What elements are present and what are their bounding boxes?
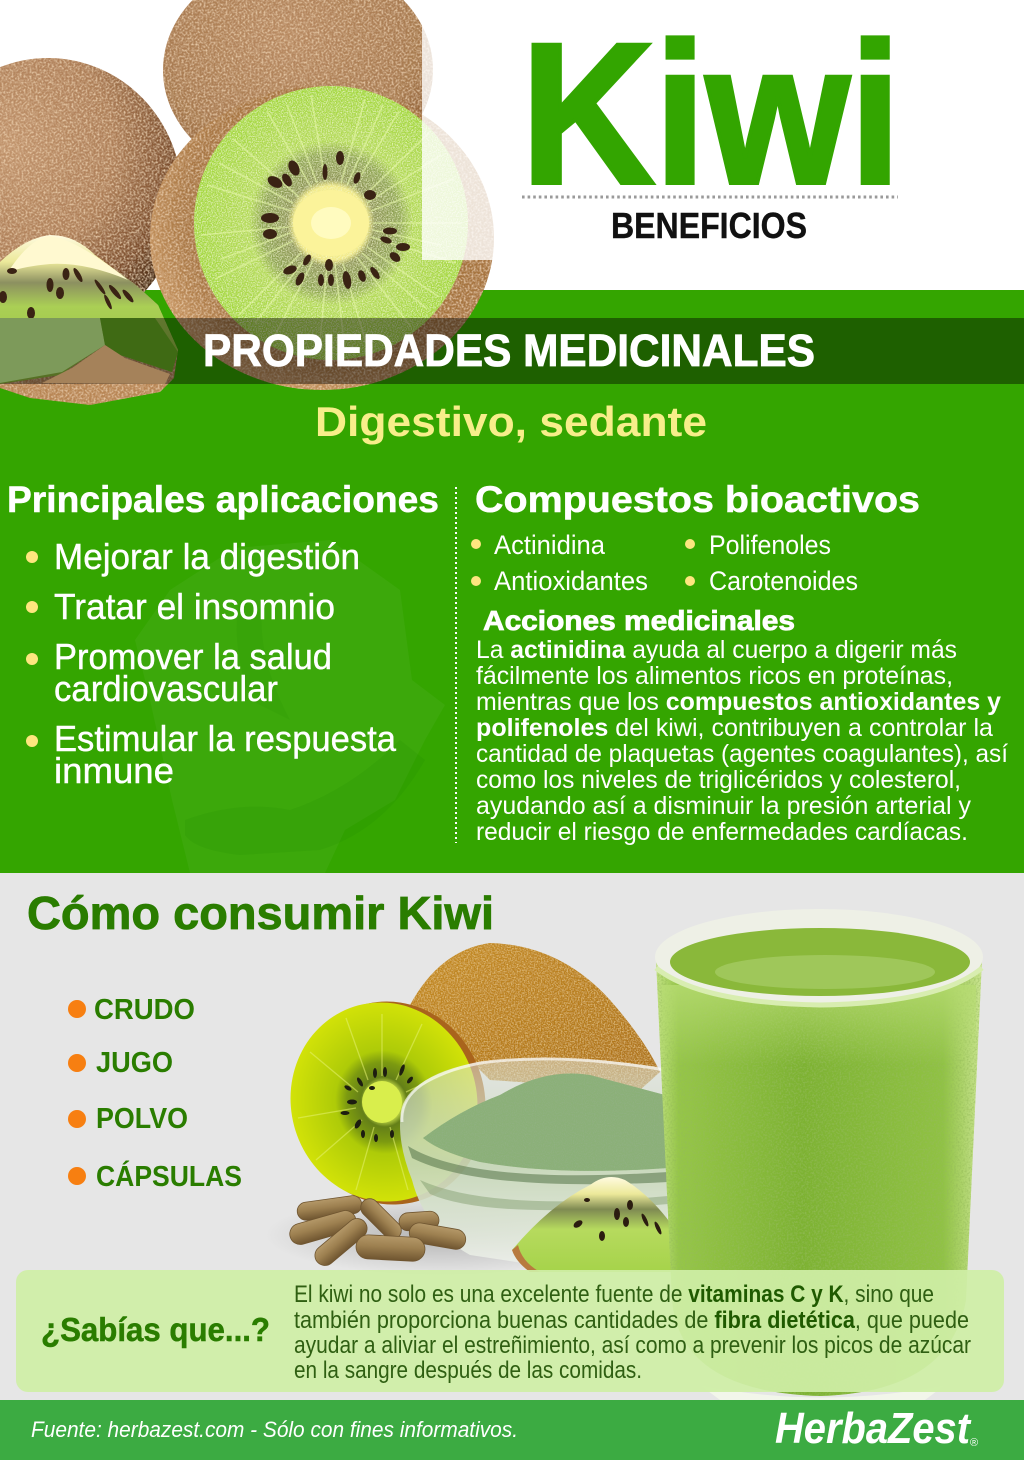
item: jugo xyxy=(68,1047,173,1079)
item: capsulas: CÁPSULAS xyxy=(96,1159,242,1193)
text block: acciones medicinales: La actinidina ayuda al cuerpo a digerir más xyxy=(476,636,957,664)
subheading: digestivo, sedante: Digestivo, sedante xyxy=(315,398,707,445)
panel: como consumir background xyxy=(0,873,1024,1400)
list item: respuesta inmune: inmune xyxy=(54,750,174,791)
text block: acciones medicinales: fácilmente los alimentos ricos en proteínas, xyxy=(476,662,953,690)
list item: respuesta inmune: Estimular la respuesta xyxy=(54,718,397,759)
text block: acciones medicinales: mientras que los compuestos antioxidantes y xyxy=(476,688,1001,716)
list: forms of consumption xyxy=(68,994,242,1193)
item: crudo: CRUDO xyxy=(94,994,195,1026)
heading: compuestos bioactivos: Compuestos bioactivos xyxy=(475,479,920,520)
illustration: golden kiwi back xyxy=(410,943,660,1090)
illustration: bowl of kiwi powder xyxy=(400,1058,668,1270)
logo: HerbaZest: HerbaZest xyxy=(775,1404,972,1453)
list item: insomnio: Tratar el insomnio xyxy=(54,586,335,627)
text block: acciones medicinales: polifenoles del kiwi, contribuyen a controlar la xyxy=(476,714,993,742)
heading: principales aplicaciones: Principales aplicaciones xyxy=(7,479,439,520)
text block: acciones medicinales xyxy=(476,636,1008,846)
text block: acciones medicinales: cantidad de plaquetas (agentes coagulantes), así xyxy=(476,740,1008,768)
illustration: kiwi wedge xyxy=(0,235,178,405)
list item: salud cardiovascular: cardiovascular xyxy=(54,668,278,709)
heading: acciones medicinales: Acciones medicinales xyxy=(483,605,795,636)
illustration: kiwi slice xyxy=(268,980,508,1226)
list item: digestion: Mejorar la digestión xyxy=(54,536,360,577)
illustration: wedge seen through band xyxy=(0,318,178,384)
panel: compuestos bioactivos xyxy=(471,479,1008,846)
panel: green properties background xyxy=(0,290,1024,873)
text block: sabias que: también proporciona buenas cantidades de fibra dietética, que puede xyxy=(294,1307,969,1334)
illustration: capsules xyxy=(287,1194,467,1270)
text block: acciones medicinales: ayudando así a disminuir la presión arterial y xyxy=(476,792,971,820)
text block: acciones medicinales: como los niveles de triglicéridos y colesterol, xyxy=(476,766,961,794)
compound: carotenoides: Carotenoides xyxy=(709,566,858,596)
compound: antioxidantes: Antioxidantes xyxy=(494,566,648,596)
list item: salud cardiovascular xyxy=(26,636,332,709)
list item: respuesta inmune xyxy=(26,718,397,791)
source note: Fuente: herbazest.com - Sólo con fines informativos. xyxy=(31,1417,518,1442)
illustration: whole kiwi, left xyxy=(0,58,182,334)
background: white header xyxy=(0,0,1024,290)
compound: actinidina: Actinidina xyxy=(494,530,606,560)
heading: como consumir kiwi: Cómo consumir Kiwi xyxy=(27,887,494,939)
title: Kiwi: Kiwi xyxy=(521,1,901,226)
dark band behind section heading xyxy=(0,318,1024,384)
list item: salud cardiovascular: Promover la salud xyxy=(54,636,332,677)
footer bar xyxy=(0,1400,1024,1460)
subtitle: Beneficios: BENEFICIOS xyxy=(611,205,807,246)
illustration: whole kiwi, top xyxy=(163,0,433,182)
illustration: ground shadow xyxy=(265,1195,615,1275)
text block: sabias que: El kiwi no solo es una excelente fuente de vitaminas C y K, sino que xyxy=(294,1281,934,1308)
panel: principales aplicaciones xyxy=(7,479,439,791)
heading: sabias que: ¿Sabías que...? xyxy=(41,1311,270,1348)
text block: sabias que xyxy=(294,1281,971,1384)
logo: registered mark: ® xyxy=(970,1437,978,1449)
panel: sabias que callout xyxy=(16,1270,1004,1392)
illustration: halved kiwi xyxy=(150,86,494,390)
text block: acciones medicinales: reducir el riesgo de enfermedades cardíacas. xyxy=(476,818,968,846)
compound: polifenoles: Polifenoles xyxy=(709,530,831,560)
text block: sabias que: en la sangre después de las comidas. xyxy=(294,1357,642,1384)
item: jugo: JUGO xyxy=(96,1047,173,1079)
heading: propiedades medicinales: PROPIEDADES MEDICINALES xyxy=(203,325,815,376)
illustration: glass of green smoothie xyxy=(655,909,983,1400)
item: polvo: POLVO xyxy=(96,1103,188,1135)
illustration: kiwi wedge in bowl xyxy=(512,1177,672,1272)
illustration: woman holding stomach silhouette xyxy=(135,540,445,873)
decorative translucent panel over kiwi xyxy=(422,0,502,260)
